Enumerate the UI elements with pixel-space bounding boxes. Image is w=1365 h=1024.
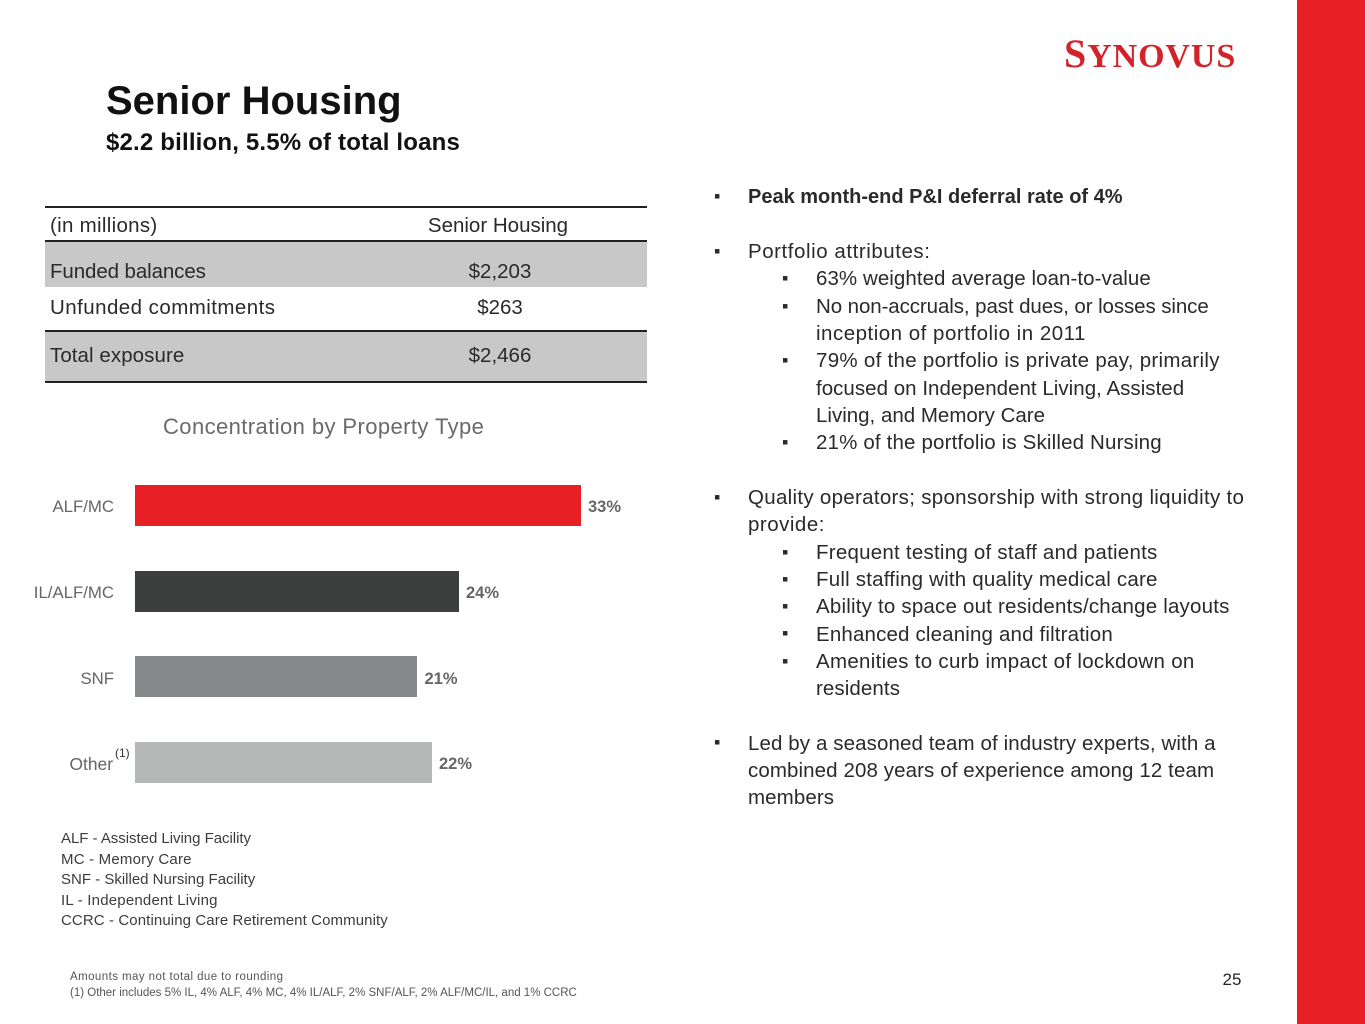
- bullet list: [714, 186, 1244, 809]
- bar SNF: [134, 656, 417, 697]
- glossary: ALF - Assisted Living Facility: [61, 830, 251, 847]
- bar ALF/MC: [134, 485, 581, 526]
- chart: concentration by property type: [34, 414, 621, 783]
- funded balances label: Funded balances: [50, 260, 206, 283]
- bullet list: ▪: [714, 241, 720, 261]
- bullet list: 21% of the portfolio is Skilled Nursing: [816, 431, 1162, 454]
- bar IL/ALF/MC: [134, 571, 459, 612]
- bullet list: ▪: [782, 569, 788, 589]
- glossary: CCRC - Continuing Care Retirement Community: [61, 912, 388, 929]
- total exposure value: $2,466: [469, 344, 531, 367]
- table header column: Senior Housing: [428, 214, 568, 237]
- bullet list: members: [748, 786, 834, 809]
- chart title: Concentration by Property Type: [163, 414, 484, 439]
- bullet list: inception of portfolio in 2011: [816, 322, 1086, 345]
- glossary: MC - Memory Care: [61, 851, 192, 868]
- funded balances row shading: [45, 242, 647, 287]
- bar Other: [134, 742, 432, 783]
- bullet list: Living, and Memory Care: [816, 404, 1045, 427]
- title: Senior Housing: [106, 79, 402, 123]
- unfunded commitments value: $263: [477, 296, 523, 319]
- bullet list: ▪: [782, 651, 788, 671]
- bullet list: residents: [816, 677, 900, 700]
- bullet list: No non-accruals, past dues, or losses since: [816, 295, 1209, 318]
- footnotes: (1) Other includes 5% IL, 4% ALF, 4% MC, 4% IL/ALF, 2% SNF/ALF, 2% ALF/MC/IL, and 1% CCRC: [70, 987, 577, 999]
- value 22%: 22%: [439, 755, 472, 773]
- bullet list: Portfolio attributes:: [748, 240, 930, 263]
- bullet list: provide:: [748, 513, 825, 536]
- bullet list: ▪: [782, 432, 788, 452]
- bullet list: Ability to space out residents/change layouts: [816, 595, 1230, 618]
- total exposure label: Total exposure: [50, 344, 184, 367]
- subtitle: $2.2 billion, 5.5% of total loans: [106, 129, 460, 156]
- value 21%: 21%: [424, 670, 458, 688]
- total exposure row shading: [45, 331, 647, 382]
- bullet list: ▪: [714, 732, 720, 752]
- bullet list: focused on Independent Living, Assisted: [816, 377, 1184, 400]
- bullet list: Frequent testing of staff and patients: [816, 541, 1158, 564]
- glossary: IL - Independent Living: [61, 892, 218, 909]
- bullet list: ▪: [782, 542, 788, 562]
- value 33%: 33%: [588, 498, 621, 516]
- bullet list: Full staffing with quality medical care: [816, 568, 1158, 591]
- funded balances value: $2,203: [469, 260, 531, 283]
- glossary: [61, 830, 388, 929]
- label IL/ALF/MC: IL/ALF/MC: [34, 583, 114, 602]
- bullet list: ▪: [714, 186, 720, 206]
- bullet list: ▪: [782, 350, 788, 370]
- label ALF/MC: ALF/MC: [52, 497, 114, 516]
- logo: SYNOVUS: [1064, 31, 1236, 76]
- glossary: SNF - Skilled Nursing Facility: [61, 871, 255, 888]
- bullet list: ▪: [714, 487, 720, 507]
- red side band: [1297, 0, 1365, 1024]
- bullet list: Led by a seasoned team of industry experts, with a: [748, 732, 1216, 755]
- bullet list: 63% weighted average loan-to-value: [816, 267, 1151, 290]
- label SNF: SNF: [80, 669, 114, 688]
- unfunded commitments label: Unfunded commitments: [50, 296, 275, 319]
- bullet list: Peak month-end P&I deferral rate of 4%: [748, 186, 1123, 208]
- footnote marker: (1): [115, 746, 130, 760]
- value 24%: 24%: [466, 584, 499, 602]
- bullet list: ▪: [782, 296, 788, 316]
- bullet list: ▪: [782, 596, 788, 616]
- table header label: (in millions): [50, 214, 158, 237]
- bullet list: Amenities to curb impact of lockdown on: [816, 650, 1195, 673]
- page number: 25: [1222, 970, 1241, 989]
- bullet list: 79% of the portfolio is private pay, primarily: [816, 349, 1220, 372]
- bullet list: Quality operators; sponsorship with strong liquidity to: [748, 486, 1244, 509]
- bullet list: Enhanced cleaning and filtration: [816, 623, 1113, 646]
- footnotes: [70, 971, 577, 999]
- label Other: Other: [70, 754, 113, 774]
- table: [45, 206, 647, 383]
- bullet list: ▪: [782, 268, 788, 288]
- footnotes: Amounts may not total due to rounding: [70, 971, 283, 983]
- bullet list: combined 208 years of experience among 12 team: [748, 759, 1214, 782]
- bullet list: ▪: [782, 623, 788, 643]
